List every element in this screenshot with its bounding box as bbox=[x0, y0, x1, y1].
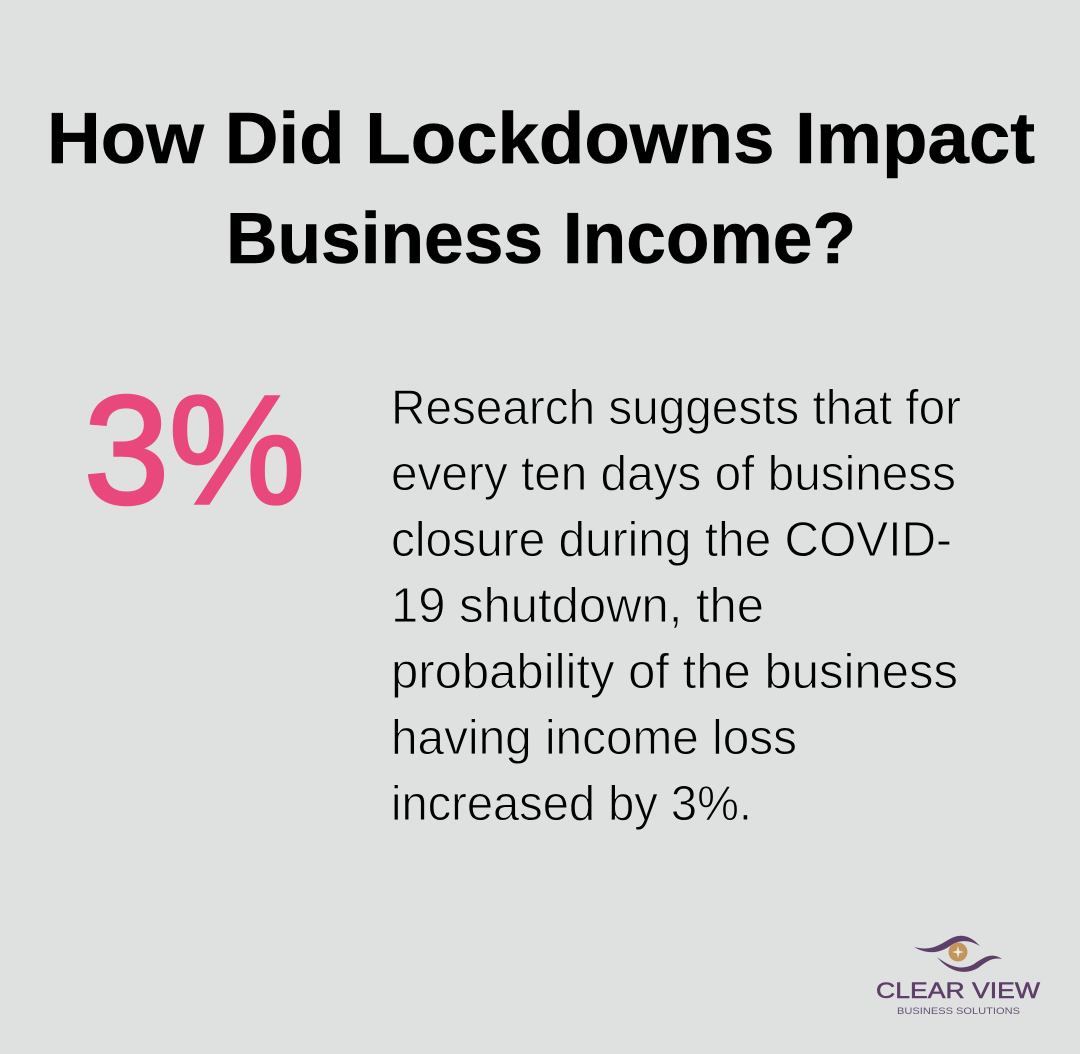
title bbox=[47, 99, 1035, 279]
description text: 19 shutdown, the bbox=[391, 579, 764, 633]
logo tagline: BUSINESS SOLUTIONS bbox=[897, 1006, 1020, 1017]
description text: every ten days of business bbox=[391, 447, 956, 501]
description text: closure during the COVID- bbox=[391, 513, 952, 567]
description text: having income loss bbox=[391, 711, 797, 765]
logo: Clear View Business Solutions bbox=[876, 936, 1040, 1017]
logo wordmark: CLEAR VIEW bbox=[876, 978, 1040, 1003]
title: Business Income? bbox=[226, 199, 856, 279]
description text: Research suggests that for bbox=[391, 381, 961, 435]
description text bbox=[391, 381, 961, 831]
title: How Did Lockdowns Impact bbox=[47, 99, 1035, 179]
big statistic: 3%: 3% bbox=[84, 364, 305, 536]
icon: eye bbox=[914, 936, 1002, 972]
description text: probability of the business bbox=[391, 645, 958, 699]
description text: increased by 3%. bbox=[391, 777, 752, 831]
